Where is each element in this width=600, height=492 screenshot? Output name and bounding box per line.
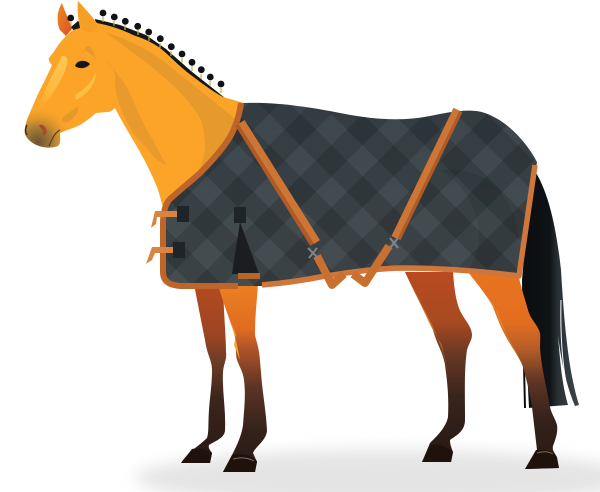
near hind leg — [468, 272, 559, 469]
chest strap upper — [151, 211, 177, 228]
horse head and neck — [24, 1, 244, 206]
throat shading — [105, 60, 166, 165]
rug — [146, 103, 537, 287]
leg highlight — [231, 322, 240, 360]
leg strap front — [240, 123, 315, 243]
rump shading — [440, 170, 520, 272]
slit gusset — [238, 273, 260, 279]
mouth — [49, 130, 60, 146]
far ear — [58, 3, 72, 36]
hoof — [525, 450, 559, 469]
leg highlight — [410, 282, 448, 372]
chest strap lower — [146, 247, 173, 264]
buckle front — [308, 248, 317, 258]
hoof — [181, 448, 212, 463]
chin dark edge — [26, 125, 27, 135]
mane ridge — [71, 19, 225, 98]
tail — [522, 168, 579, 408]
neck shading — [105, 32, 238, 172]
nostril — [39, 125, 47, 135]
plaits — [67, 10, 224, 93]
chest patch lower — [173, 242, 185, 258]
front slit — [232, 222, 259, 274]
cheek highlight — [75, 72, 96, 100]
chest patch upper — [177, 206, 189, 222]
muzzle shading — [24, 110, 67, 148]
eye — [75, 61, 90, 68]
hoof — [223, 454, 257, 472]
leg highlight — [484, 292, 523, 366]
binding: front and bottom — [163, 103, 241, 286]
rug body — [162, 103, 537, 287]
binding: bottom rear and right — [262, 165, 535, 285]
slit patch — [234, 207, 246, 223]
hoof — [422, 444, 453, 462]
jaw shading — [62, 46, 96, 123]
lower strap V — [317, 246, 389, 285]
far front leg — [181, 284, 226, 463]
near front leg — [218, 284, 267, 472]
ground shadow — [135, 450, 600, 492]
buckle rear — [390, 238, 398, 248]
ear near — [78, 1, 98, 33]
nose highlight — [33, 56, 67, 118]
far hind leg — [405, 272, 472, 462]
leg strap rear — [396, 110, 458, 238]
